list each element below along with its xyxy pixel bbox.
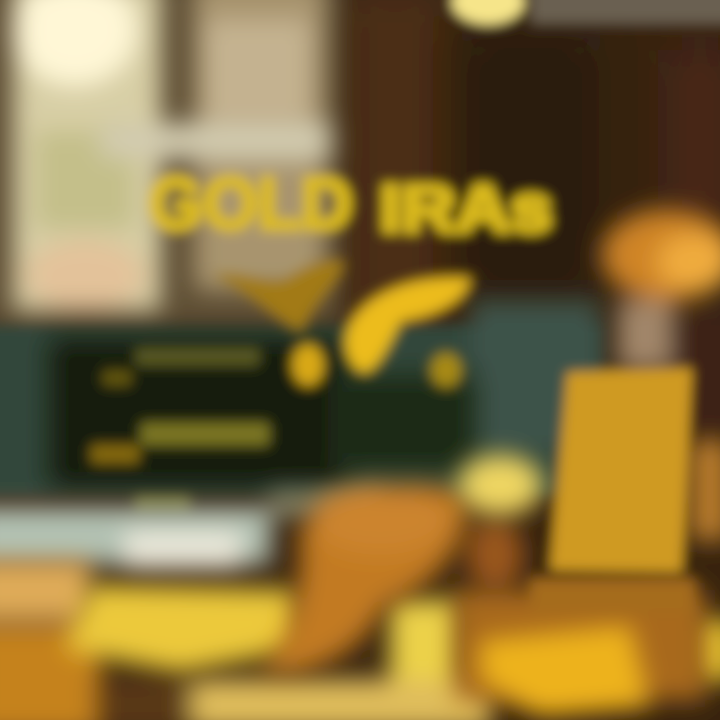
gold bar: standing bar	[550, 368, 692, 572]
text block: board lines	[90, 348, 270, 511]
icon: world map	[215, 260, 472, 388]
gold pieces: hand shape	[260, 485, 523, 673]
gold bar: front slab	[480, 625, 650, 715]
light band below board	[0, 492, 380, 568]
gold bar: small bright piece	[458, 455, 542, 515]
gold bar: base shadow	[530, 578, 695, 614]
text line two accent	[90, 444, 140, 464]
title	[148, 162, 552, 245]
top right ceiling	[530, 0, 720, 24]
text line two	[140, 422, 270, 446]
window: second beige column	[100, 0, 330, 290]
gold base table	[0, 560, 720, 720]
right lamp	[602, 210, 720, 430]
gold bar: flat slab	[65, 585, 300, 672]
title: GOLD	[148, 162, 352, 245]
panel: dark green board	[0, 300, 600, 495]
text line one	[135, 348, 260, 366]
window: bright left column	[13, 0, 160, 310]
gold bar: right side pieces	[455, 440, 720, 700]
text line one accent	[102, 370, 132, 386]
top lamp glow	[452, 0, 524, 24]
text line three	[135, 497, 190, 511]
title: IRAs	[380, 171, 552, 245]
